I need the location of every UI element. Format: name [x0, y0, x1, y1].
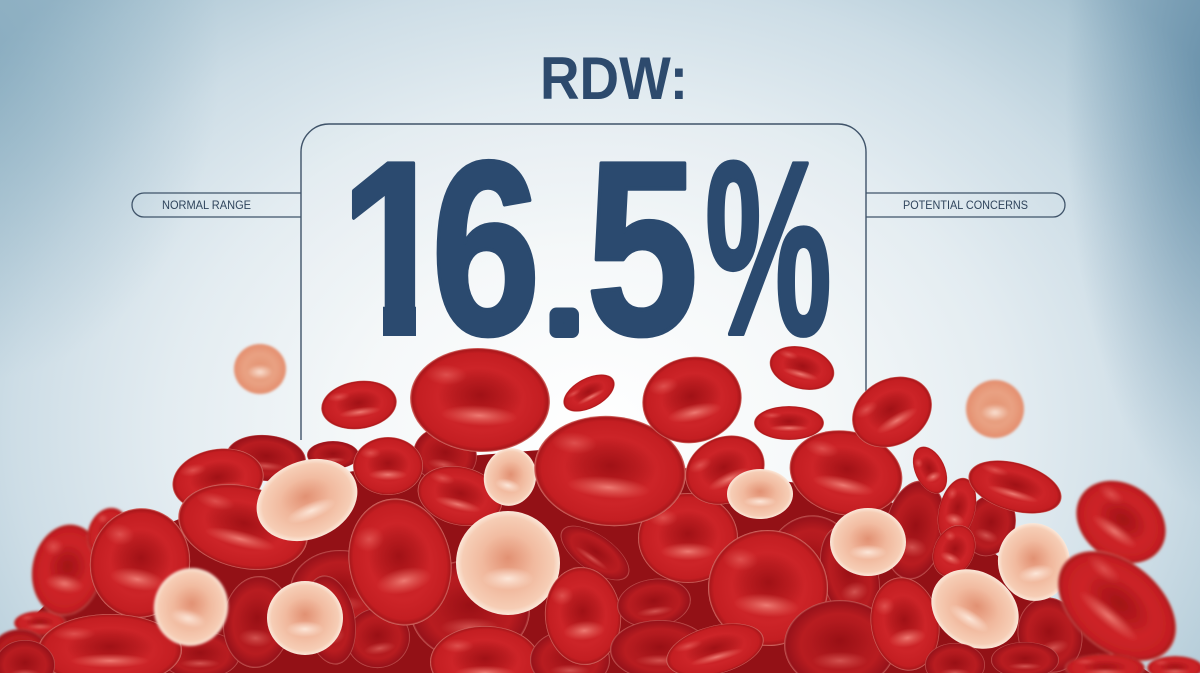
- value: 16.5%: 5: [586, 109, 698, 387]
- value: 16.5%: [352, 158, 830, 338]
- value: 16.5%: %: [705, 110, 832, 387]
- pill: potential concerns: [866, 193, 1065, 217]
- value: 16.5%: 1: [340, 110, 450, 387]
- value: 16.5%: 6: [431, 110, 541, 387]
- cell: floating red sliver: [557, 367, 621, 419]
- cell: floating red centre: [634, 348, 750, 452]
- cell: floating red tilted: [839, 362, 945, 462]
- cell: floating pink right: [966, 380, 1024, 438]
- panel: value frame: [301, 124, 866, 440]
- cell: floating pink left: [234, 344, 286, 394]
- cell: floating red flat: [754, 406, 824, 440]
- label: normal range: NORMAL RANGE: [162, 200, 251, 212]
- cell: floating red small: [318, 376, 400, 434]
- value: 16.5%: .: [549, 232, 580, 355]
- label: potential concerns: POTENTIAL CONCERNS: [903, 200, 1028, 212]
- heading: RDW: RDW:: [540, 45, 688, 112]
- blood cell pile: [0, 344, 1200, 673]
- cell: floating red top: [765, 339, 839, 397]
- floating cells: [234, 339, 1024, 462]
- pill: normal range: [132, 193, 301, 217]
